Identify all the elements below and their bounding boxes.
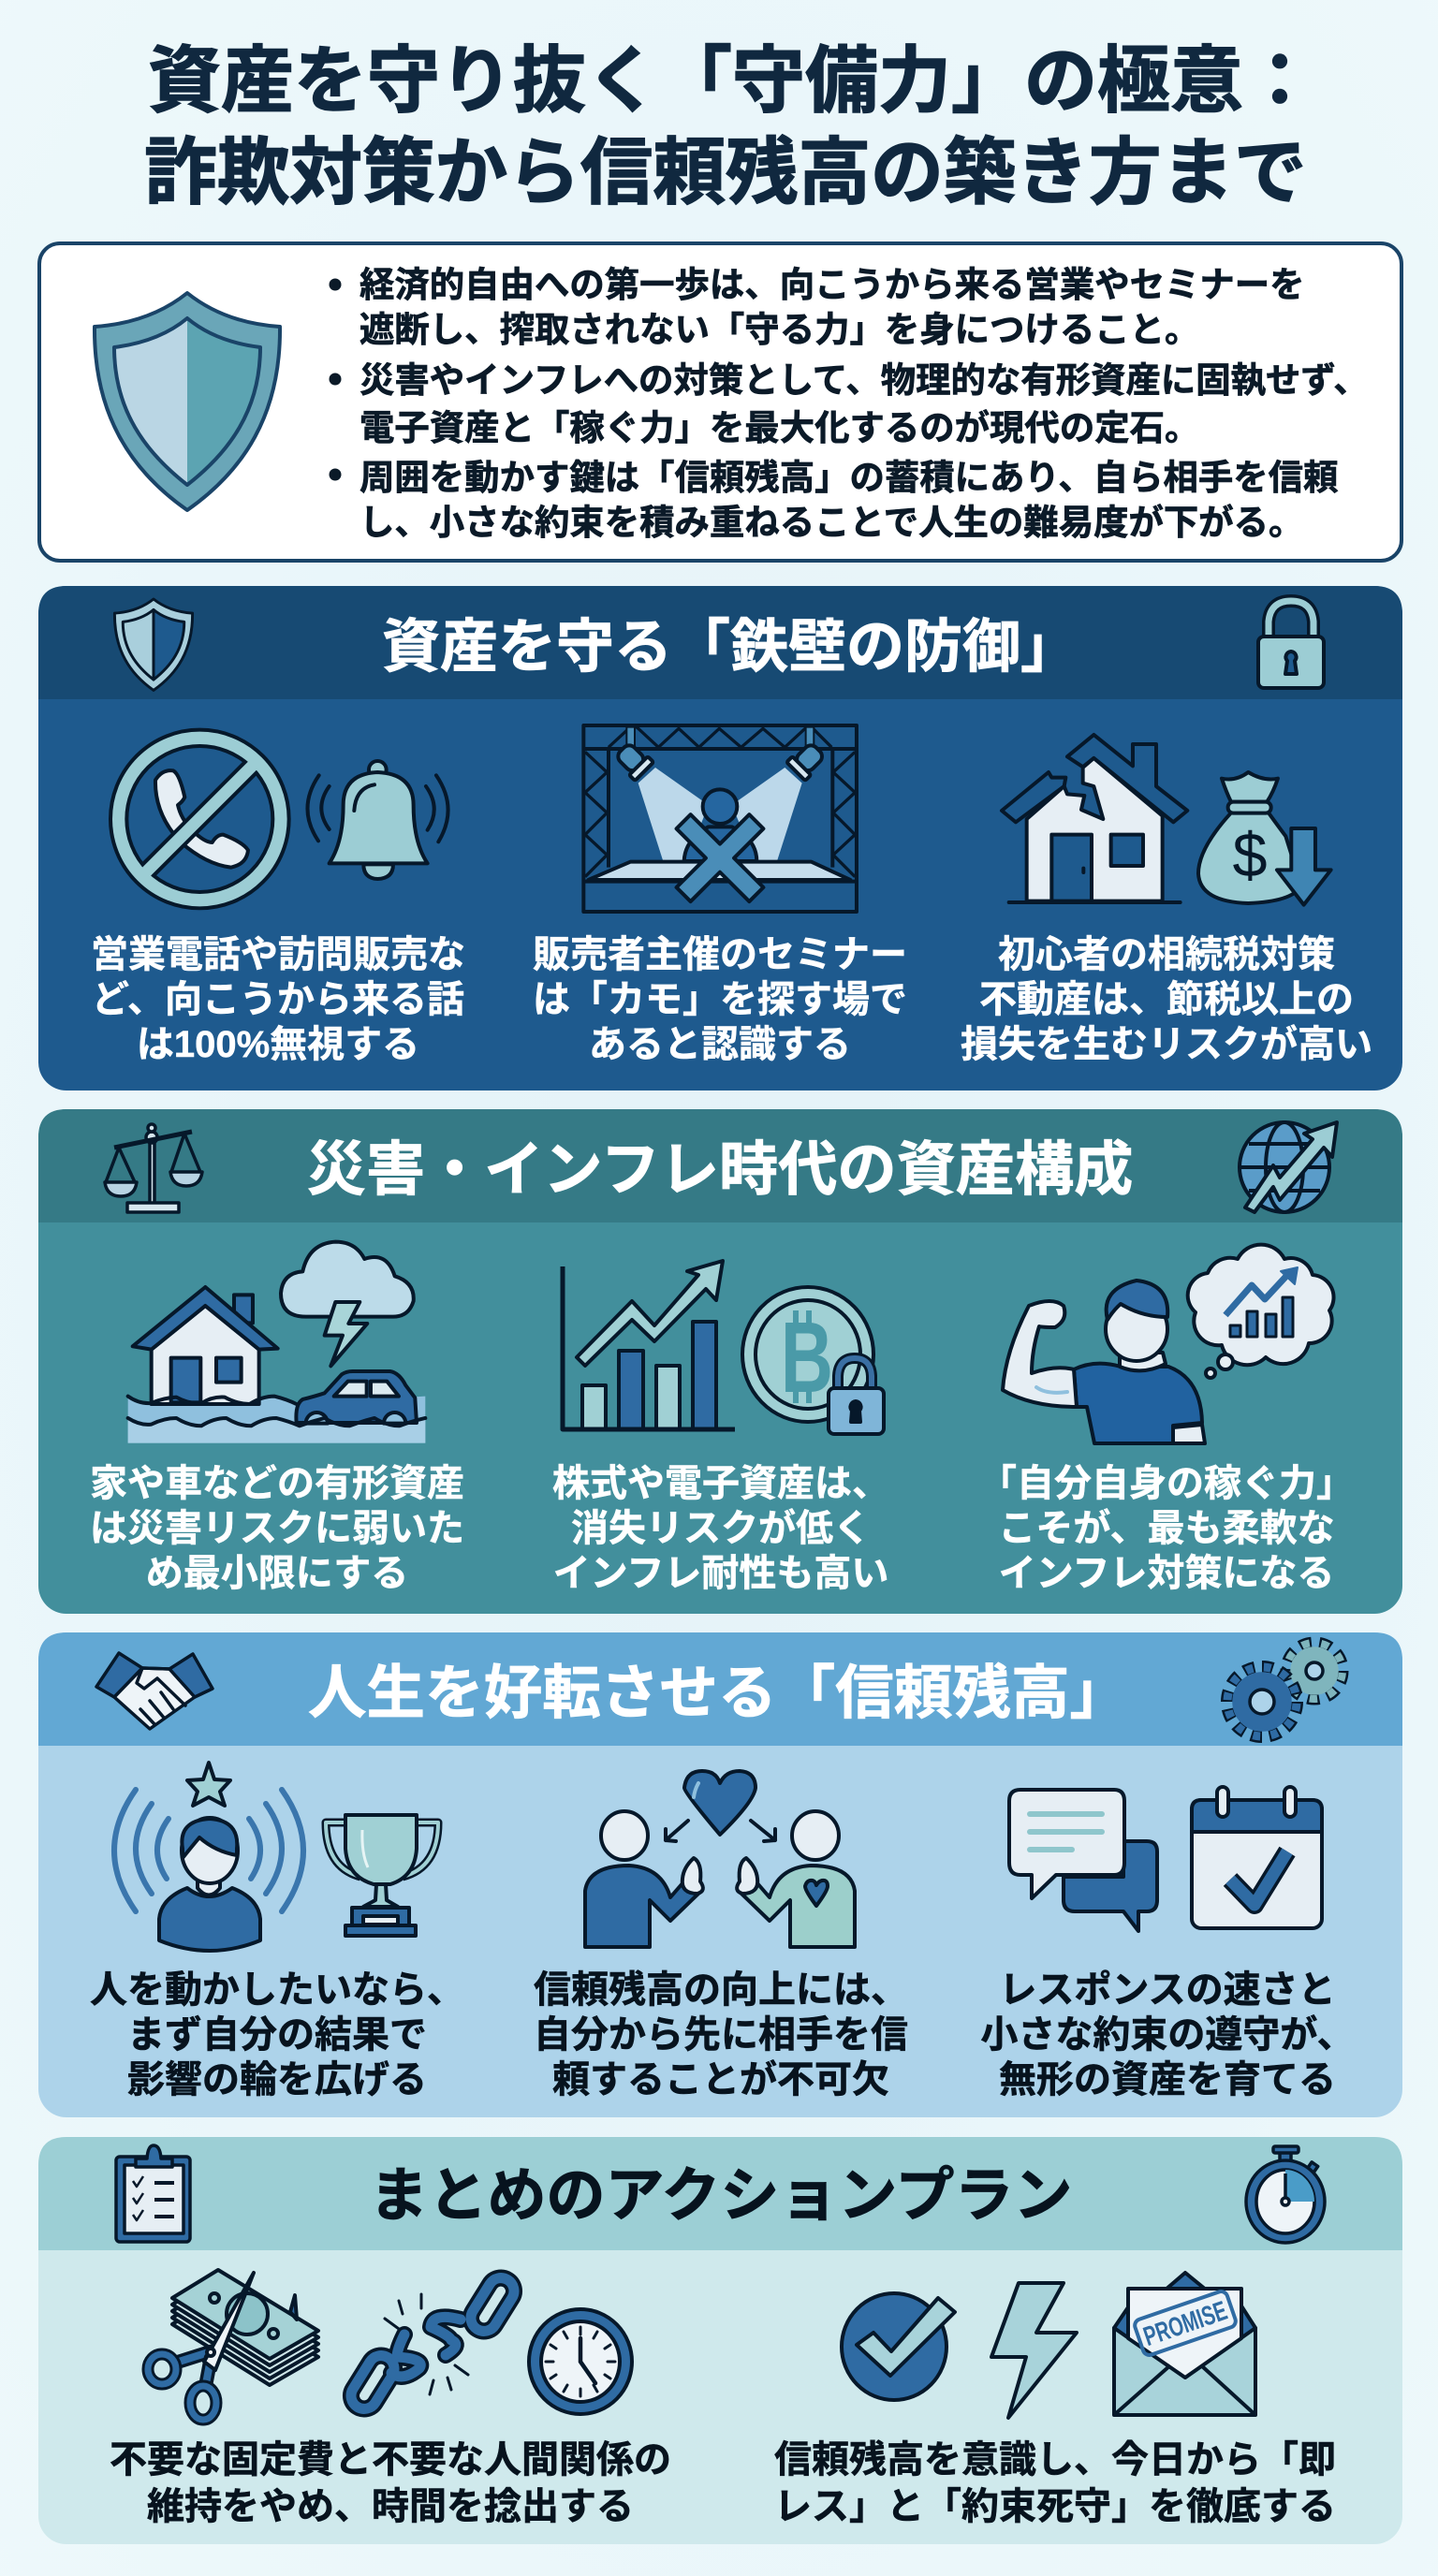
caption column 1: め最小限にする — [146, 1553, 408, 1594]
icon: bitcoin with padlock — [742, 1287, 884, 1434]
icon: trophy — [326, 1815, 438, 1936]
icon: scissors cutting money — [148, 2270, 318, 2420]
bullet list: し、小さな約束を積み重ねることで人生の難易度が下がる。 — [360, 503, 1303, 542]
icon: clipboard — [116, 2145, 190, 2242]
title: 詐欺対策から信頼残高の築き方まで — [144, 133, 1307, 213]
stamp: promise — [1133, 2290, 1238, 2357]
panel: iron defense — [38, 586, 1402, 1090]
icon: broken chain — [346, 2273, 519, 2414]
caption column 1: 人を動かしたいなら、 — [90, 1969, 464, 2011]
caption column 2: 信頼残高の向上には、 — [534, 1969, 908, 2011]
panel: trust balance — [38, 1632, 1402, 2117]
caption column 3: 「自分自身の稼ぐ力」 — [979, 1463, 1354, 1504]
bullet list — [330, 265, 1369, 542]
icon: promise envelope — [1114, 2273, 1255, 2415]
caption column 1: は災害リスクに弱いた — [90, 1508, 464, 1549]
action text right: レス」と「約束死守」を徹底する — [774, 2486, 1336, 2527]
action text left — [110, 2439, 671, 2527]
icon: strong person with thought bubble — [1003, 1245, 1334, 1443]
icon: rising chart — [563, 1261, 735, 1429]
caption column 2: 自分から先に相手を信 — [534, 2014, 908, 2056]
heading: trust balance: 人生を好転させる「信頼残高」 — [308, 1661, 1128, 1726]
icon: globe with arrow — [1240, 1122, 1337, 1212]
icon: calendar with check — [1192, 1787, 1322, 1928]
action text right — [774, 2439, 1336, 2527]
caption column 2: インフレ耐性も高い — [553, 1553, 888, 1594]
icon: broken house and money bag — [1002, 735, 1331, 905]
caption column 3: こそが、最も柔軟な — [998, 1508, 1335, 1549]
icon: handshake — [96, 1653, 213, 1729]
caption column 1: 家や車などの有形資産 — [90, 1463, 464, 1504]
icon: scales — [105, 1124, 202, 1212]
panel: action plan — [38, 2137, 1402, 2544]
title — [144, 39, 1316, 213]
caption column 2: あると認識する — [589, 1024, 851, 1065]
panel: summary — [39, 243, 1401, 561]
bullet list: 電子資産と「稼ぐ力」を最大化するのが現代の定石。 — [360, 408, 1199, 447]
bullet list: 災害やインフレへの対策として、物理的な有形資産に固執せず、 — [360, 360, 1369, 400]
icon: lightning bolt — [991, 2283, 1077, 2418]
action text right: 信頼残高を意識し、今日から「即 — [774, 2439, 1336, 2481]
caption column 2 — [552, 1463, 889, 1594]
caption column 3: 不動産は、節税以上の — [979, 979, 1354, 1020]
caption column 3: 損失を生むリスクが高い — [961, 1024, 1372, 1065]
caption column 1 — [90, 1969, 464, 2100]
caption column 3 — [961, 934, 1372, 1065]
caption column 1 — [91, 934, 465, 1065]
panel: asset allocation — [38, 1109, 1402, 1614]
caption column 2: 消失リスクが低く — [571, 1508, 871, 1549]
caption column 2 — [533, 934, 907, 1065]
caption column 2: 株式や電子資産は、 — [552, 1463, 889, 1504]
caption column 1: 影響の輪を広げる — [127, 2059, 427, 2100]
caption column 2 — [534, 1969, 908, 2100]
bullet list: 周囲を動かす鍵は「信頼残高」の蓄積にあり、自ら相手を信頼 — [360, 458, 1338, 497]
icon: flooded house, storm and car — [128, 1242, 425, 1443]
caption column 2: 販売者主催のセミナー — [533, 934, 907, 975]
icon: header shield — [114, 599, 193, 690]
caption column 1 — [90, 1463, 464, 1594]
icon: padlock — [1258, 601, 1324, 688]
icon: stopwatch — [1246, 2146, 1325, 2243]
bullet list: 遮断し、搾取されない「守る力」を身につけること。 — [360, 310, 1199, 349]
icon: bitcoin with padlock: B — [781, 1300, 833, 1413]
caption column 3: 小さな約束の遵守が、 — [980, 2014, 1355, 2056]
caption column 3: レスポンスの速さと — [999, 1969, 1336, 2011]
heading: iron defense: 資産を守る「鉄壁の防御」 — [382, 615, 1078, 680]
icon: influence person with star — [114, 1763, 303, 1951]
title: 資産を守り抜く「守備力」の極意： — [148, 39, 1316, 122]
caption column 3 — [979, 1463, 1354, 1594]
bullet list: 経済的自由への第一歩は、向こうから来る営業やセミナーを — [360, 265, 1305, 304]
icon: chat bubbles — [1009, 1790, 1157, 1931]
icon: broken house and money bag: $ — [1232, 822, 1268, 891]
icon: seminar stage with cross — [583, 725, 857, 930]
icon: clock — [529, 2309, 632, 2414]
icon: gears — [1227, 1643, 1343, 1736]
heading: asset allocation: 災害・インフレ時代の資産構成 — [307, 1137, 1133, 1203]
heading: action plan: まとめのアクションプラン — [370, 2163, 1072, 2229]
caption column 3: 初心者の相続税対策 — [998, 934, 1335, 975]
caption column 2: 頼することが不可欠 — [552, 2059, 889, 2100]
caption column 2: は「カモ」を探す場で — [533, 979, 907, 1020]
action text left: 不要な固定費と不要な人間関係の — [110, 2439, 671, 2481]
caption column 1: は100%無視する — [137, 1024, 419, 1065]
caption column 3: インフレ対策になる — [999, 1553, 1334, 1594]
icon: check mark — [842, 2293, 955, 2400]
stamp: promise: PROMISE — [1140, 2296, 1231, 2352]
caption column 1: 営業電話や訪問販売な — [91, 934, 465, 975]
icon: two people exchanging trust — [585, 1771, 855, 1947]
caption column 1: ど、向こうから来る話 — [92, 979, 464, 1020]
action text left: 維持をやめ、時間を捻出する — [147, 2486, 634, 2527]
icon: no phone calls and bell — [119, 738, 448, 900]
caption column 1: まず自分の結果で — [127, 2014, 427, 2056]
icon: large shield — [95, 293, 280, 510]
caption column 3: 無形の資産を育てる — [999, 2059, 1336, 2100]
caption column 3 — [980, 1969, 1355, 2100]
